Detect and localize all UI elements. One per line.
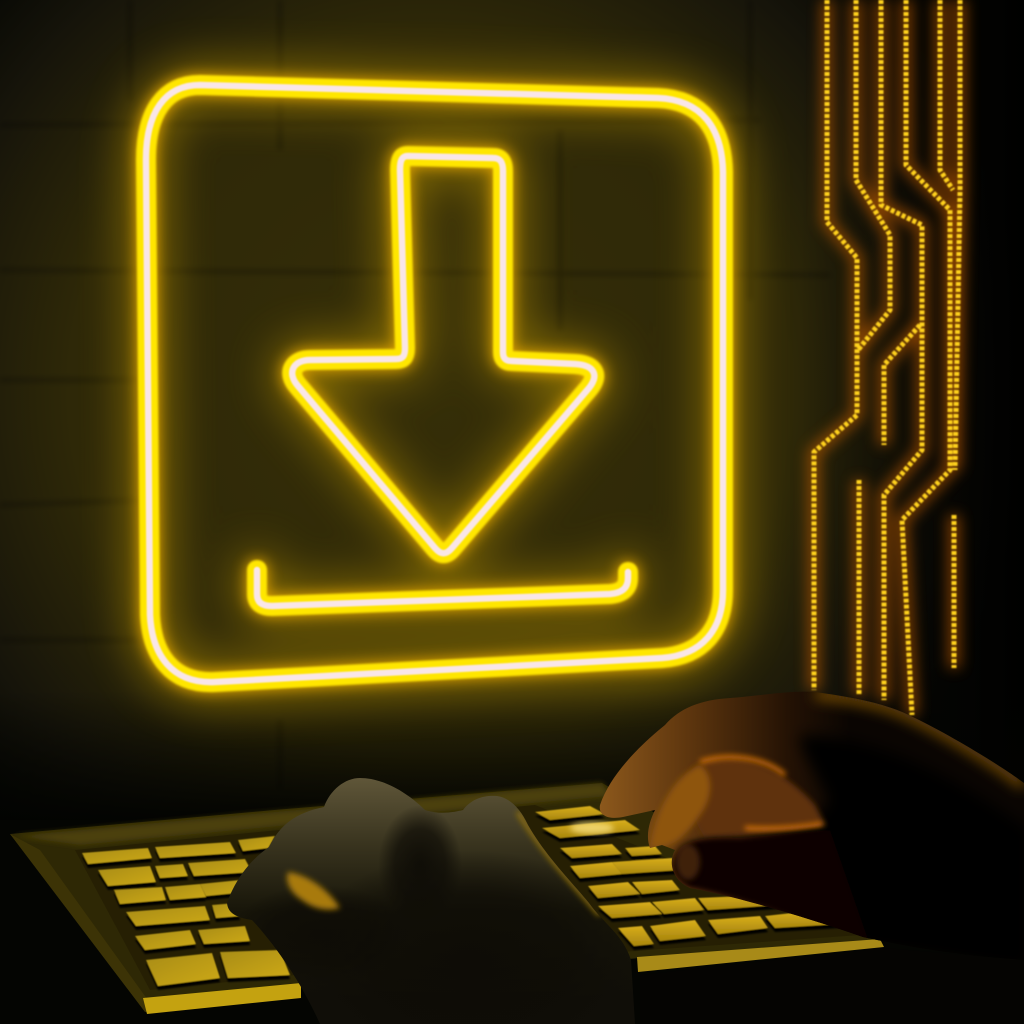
keyboard body <box>10 783 880 1000</box>
neon download icon <box>146 85 723 682</box>
circuit glow <box>814 0 960 715</box>
near glow <box>146 85 723 682</box>
neon outer tube <box>146 85 723 682</box>
front strips <box>143 983 301 1014</box>
keyboard left edge <box>10 834 155 1012</box>
key well <box>75 805 860 990</box>
circuit dotted lines <box>814 0 960 715</box>
thumb <box>672 830 870 945</box>
right hand <box>600 692 1024 941</box>
finger gap rim <box>700 757 822 829</box>
keyboard <box>10 783 884 1014</box>
wide glow <box>146 85 723 682</box>
keyboard hot spot <box>570 822 614 834</box>
yellow rim light <box>518 812 600 915</box>
finger gap orange <box>701 760 828 836</box>
right keys <box>535 806 840 946</box>
left keys <box>82 836 290 986</box>
back of hand shadow <box>749 732 1023 960</box>
keyboard top rim <box>14 783 610 845</box>
middle finger <box>650 765 710 848</box>
circuit traces <box>814 0 960 715</box>
finger gap glow <box>287 872 340 910</box>
neon inner core <box>146 85 723 682</box>
upper rim light <box>815 694 1024 785</box>
thumb tip <box>676 844 700 880</box>
foreground shade <box>640 948 1024 1024</box>
wall texture <box>0 0 830 790</box>
left hand <box>227 778 640 1024</box>
hand silhouette <box>600 692 1024 960</box>
knuckle shadows <box>276 810 601 962</box>
